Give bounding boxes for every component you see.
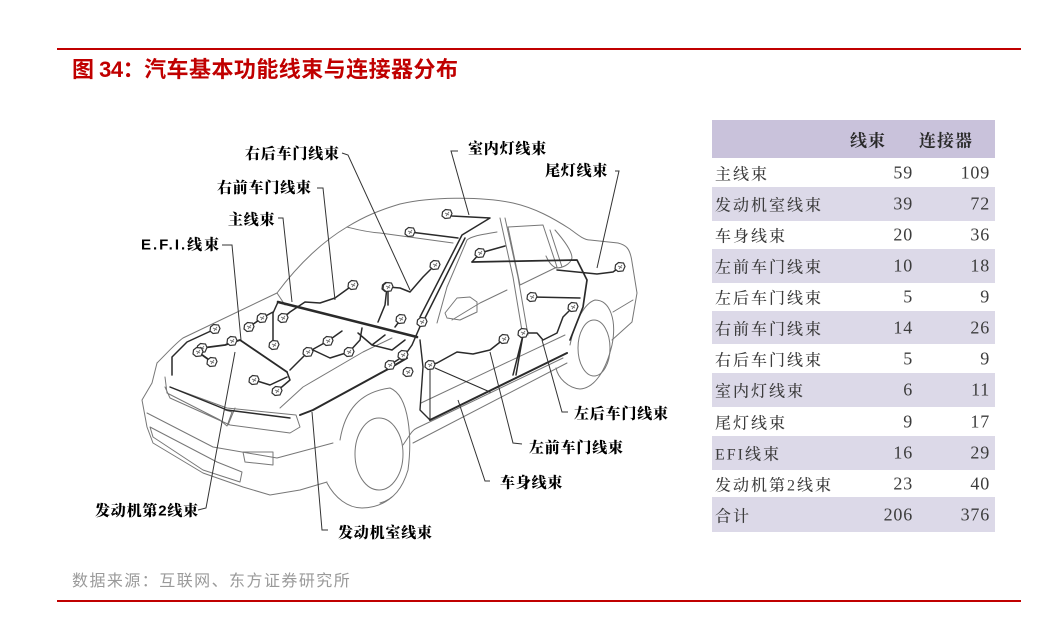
row: right front door harness xyxy=(712,311,995,344)
table header: 线束 xyxy=(850,132,886,150)
table header xyxy=(712,120,995,158)
row: tail light harness xyxy=(712,407,995,436)
row: interior light harness: 6 xyxy=(903,380,913,400)
wiring harnesses xyxy=(170,214,620,420)
table header: 连接器 xyxy=(919,132,973,150)
row: engine room harness xyxy=(712,187,995,221)
car body outline xyxy=(142,198,637,508)
harness labels: 左后车门线束 xyxy=(574,404,669,422)
row: engine second harness: 发动机第2线束 xyxy=(715,477,833,494)
harness labels: 右前车门线束 xyxy=(217,178,312,196)
row: left rear door harness: 9 xyxy=(980,286,990,306)
harness labels: 室内灯线束 xyxy=(468,140,547,158)
row: engine room harness: 发动机室线束 xyxy=(715,198,823,214)
row: left rear door harness xyxy=(712,283,995,311)
row: body harness: 36 xyxy=(970,224,990,244)
row: right front door harness: 26 xyxy=(970,317,990,337)
row: total: 206 xyxy=(884,504,913,524)
row: left rear door harness: 5 xyxy=(903,286,913,306)
row: left front door harness: 10 xyxy=(893,256,913,276)
harness labels: 车身线束 xyxy=(500,474,563,492)
row: interior light harness: 室内灯线束 xyxy=(715,384,805,400)
row: tail light harness: 9 xyxy=(903,411,913,431)
row: main harness: 59 xyxy=(893,162,913,182)
row: tail light harness: 尾灯线束 xyxy=(715,415,787,432)
row: total xyxy=(712,497,995,532)
row: body harness: 20 xyxy=(893,224,913,244)
row: EFI harness: 16 xyxy=(893,442,913,462)
connectors xyxy=(193,210,625,396)
source note: 数据来源：互联网、东方证券研究所 xyxy=(72,573,351,590)
rear wheel xyxy=(578,320,610,376)
row: engine room harness: 39 xyxy=(893,194,913,214)
harness labels: 左前车门线束 xyxy=(529,438,624,456)
harness labels: 发动机第2线束 xyxy=(95,502,199,520)
title: 图 34：汽车基本功能线束与连接器分布 xyxy=(72,57,458,82)
row: right rear door harness: 9 xyxy=(980,348,990,368)
row: engine second harness: 23 xyxy=(893,473,913,493)
harness labels: 发动机室线束 xyxy=(338,524,433,542)
row: engine second harness xyxy=(712,470,995,497)
row: engine second harness: 40 xyxy=(970,473,990,493)
table: harness and connector counts xyxy=(712,120,995,532)
row: body harness xyxy=(712,221,995,249)
row: body harness: 车身线束 xyxy=(715,228,787,246)
row: left rear door harness: 左后车门线束 xyxy=(715,290,823,308)
row: left front door harness: 左前车门线束 xyxy=(715,260,823,276)
row: right rear door harness: 5 xyxy=(903,348,913,368)
row: right front door harness: 右前车门线束 xyxy=(715,321,823,338)
harness labels: 尾灯线束 xyxy=(545,162,608,180)
harness labels: E.F.I.线束 xyxy=(141,236,221,254)
row: total: 合计 xyxy=(715,508,751,525)
row: right rear door harness: 右后车门线束 xyxy=(715,352,823,369)
row: right front door harness: 14 xyxy=(893,317,913,337)
bottom red rule xyxy=(57,600,1021,602)
harness labels xyxy=(95,140,669,542)
row: interior light harness: 11 xyxy=(971,380,990,400)
row: EFI harness: EFI线束 xyxy=(715,446,781,464)
row: total: 376 xyxy=(961,504,990,524)
row: right rear door harness xyxy=(712,344,995,373)
row: tail light harness: 17 xyxy=(970,411,990,431)
top red rule xyxy=(57,48,1021,50)
harness labels: 主线束 xyxy=(228,210,275,228)
harness labels: 右后车门线束 xyxy=(245,144,340,162)
row: EFI harness xyxy=(712,436,995,470)
leader lines xyxy=(198,151,619,530)
row: EFI harness: 29 xyxy=(970,442,990,462)
front wheel xyxy=(340,388,410,503)
row: main harness xyxy=(712,158,995,187)
row: engine room harness: 72 xyxy=(970,194,990,214)
row: main harness: 主线束 xyxy=(715,166,769,183)
row: main harness: 109 xyxy=(961,162,990,182)
row: left front door harness: 18 xyxy=(970,256,990,276)
row: left front door harness xyxy=(712,249,995,283)
row: interior light harness xyxy=(712,373,995,407)
